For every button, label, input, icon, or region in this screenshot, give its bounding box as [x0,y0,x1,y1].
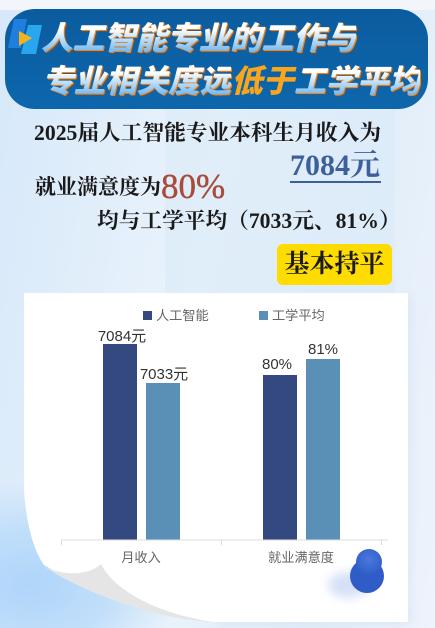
bar chart [61,328,388,565]
text: comparison: 均与工学平均（7033元、81%） [97,209,401,233]
curled page corner [43,564,213,622]
title line 1: 人工智能专业的工作与 [41,20,356,56]
title banner [5,9,428,109]
badge: roughly equal [277,244,392,285]
icon: play logo [8,19,42,54]
panel: chart card [24,293,410,624]
badge: roughly equal: 基本持平 [284,251,384,278]
bar chart: 80% [262,356,292,373]
icon: push pin [328,549,384,598]
bar chart: 就业满意度 [268,549,334,565]
bar chart: 7033元 [140,366,188,383]
bar chart: 7084元 [98,328,146,345]
text: income sentence: 2025届人工智能专业本科生月收入为 [34,121,381,145]
chart legend: 工学平均 [272,308,325,323]
text: satisfaction sentence: 就业满意度为80% [35,167,225,206]
bar chart: 81% [308,341,338,358]
chart legend [143,308,325,323]
chart legend: 人工智能 [156,308,209,323]
bar chart: 月收入 [121,550,161,565]
title line 2: 专业相关度远低于工学平均 [42,63,420,99]
text: income value: 7084元 [290,149,380,182]
